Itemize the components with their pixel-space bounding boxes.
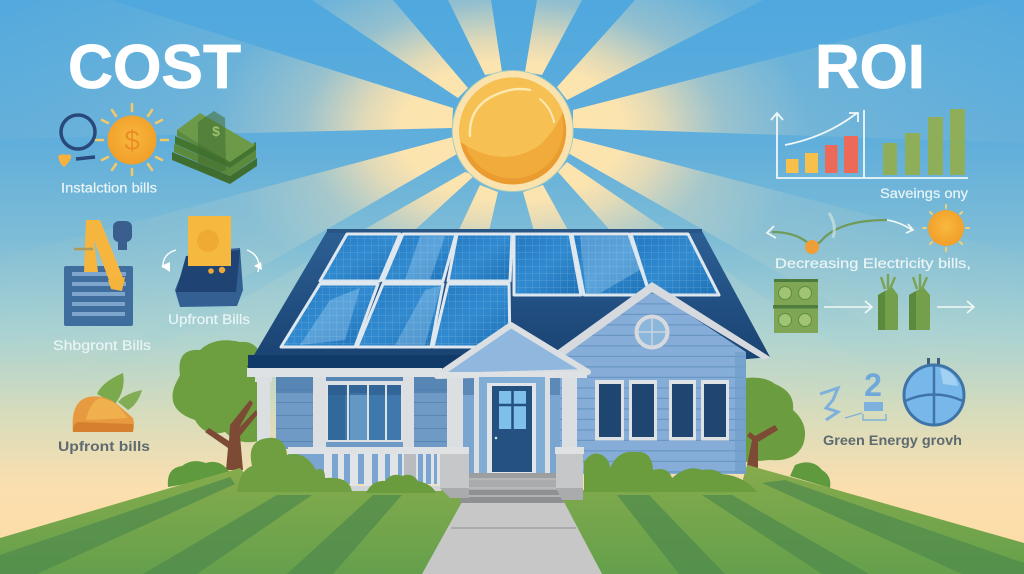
label: upfront bills dark: Upfront bills bbox=[58, 438, 150, 454]
stoop pedestals bbox=[438, 447, 584, 500]
bush: low middle bbox=[366, 475, 436, 493]
icon: sun coin small bbox=[923, 205, 969, 251]
label: upfront bills light: Upfront Bills bbox=[168, 312, 250, 327]
main wall with gable bbox=[555, 282, 770, 474]
label: green energy: Green Energy grovh bbox=[823, 432, 962, 448]
label: savings: Saveings ony bbox=[880, 186, 968, 201]
walkway bbox=[422, 500, 602, 574]
porch beam bbox=[247, 368, 442, 377]
steps bbox=[460, 473, 564, 503]
label: installation bills: Instalction bills bbox=[61, 180, 157, 196]
label: shbgront bills: Shbgront Bills bbox=[53, 338, 151, 353]
lawn bbox=[0, 465, 1024, 574]
title: COST: COST bbox=[68, 33, 241, 102]
right windows bbox=[595, 380, 729, 440]
icon: bill curve with arrows bbox=[767, 213, 913, 254]
bush: right front bbox=[584, 452, 757, 492]
house bbox=[247, 229, 770, 503]
sun bbox=[452, 60, 573, 192]
roof bbox=[247, 229, 770, 372]
panel: cost items bbox=[53, 104, 262, 454]
icon: dollar bills bbox=[773, 279, 818, 333]
porch wall bbox=[276, 377, 560, 473]
tree: left bbox=[168, 340, 262, 487]
icon: sun coin: $ bbox=[124, 125, 140, 156]
solar panels bbox=[281, 234, 719, 347]
porch window bbox=[325, 381, 404, 442]
icon: globe meter bbox=[904, 358, 964, 425]
chart: savings bars bbox=[771, 109, 968, 178]
icon: shutter with yellow ladder bbox=[64, 220, 133, 326]
icon: sun coin bbox=[96, 104, 168, 175]
railing bbox=[288, 447, 441, 491]
title: ROI: ROI bbox=[815, 33, 925, 102]
shrubs bbox=[237, 438, 757, 493]
porch columns bbox=[255, 377, 577, 473]
icon: gold chip on blue tray bbox=[161, 216, 262, 307]
icon: magnifier ring bbox=[58, 115, 95, 167]
label: decreasing electricity: Decreasing Electricity bills, bbox=[775, 256, 971, 271]
tree: right bbox=[746, 378, 830, 488]
bush: left front bbox=[237, 438, 352, 492]
panel: ROI items bbox=[767, 109, 974, 448]
arrow: onward bbox=[937, 301, 974, 313]
icon: green cartons bbox=[878, 274, 930, 330]
icon: number two chart bbox=[820, 367, 886, 420]
icon: orange fruit with leaves bbox=[73, 373, 142, 432]
arrow: bills to plants bbox=[824, 301, 872, 313]
door bbox=[479, 377, 545, 473]
icon: money stack bbox=[172, 111, 257, 184]
icon: number two chart: 2 bbox=[864, 367, 882, 403]
icon: money stack: $ bbox=[212, 123, 220, 139]
porch gable bbox=[437, 325, 588, 378]
